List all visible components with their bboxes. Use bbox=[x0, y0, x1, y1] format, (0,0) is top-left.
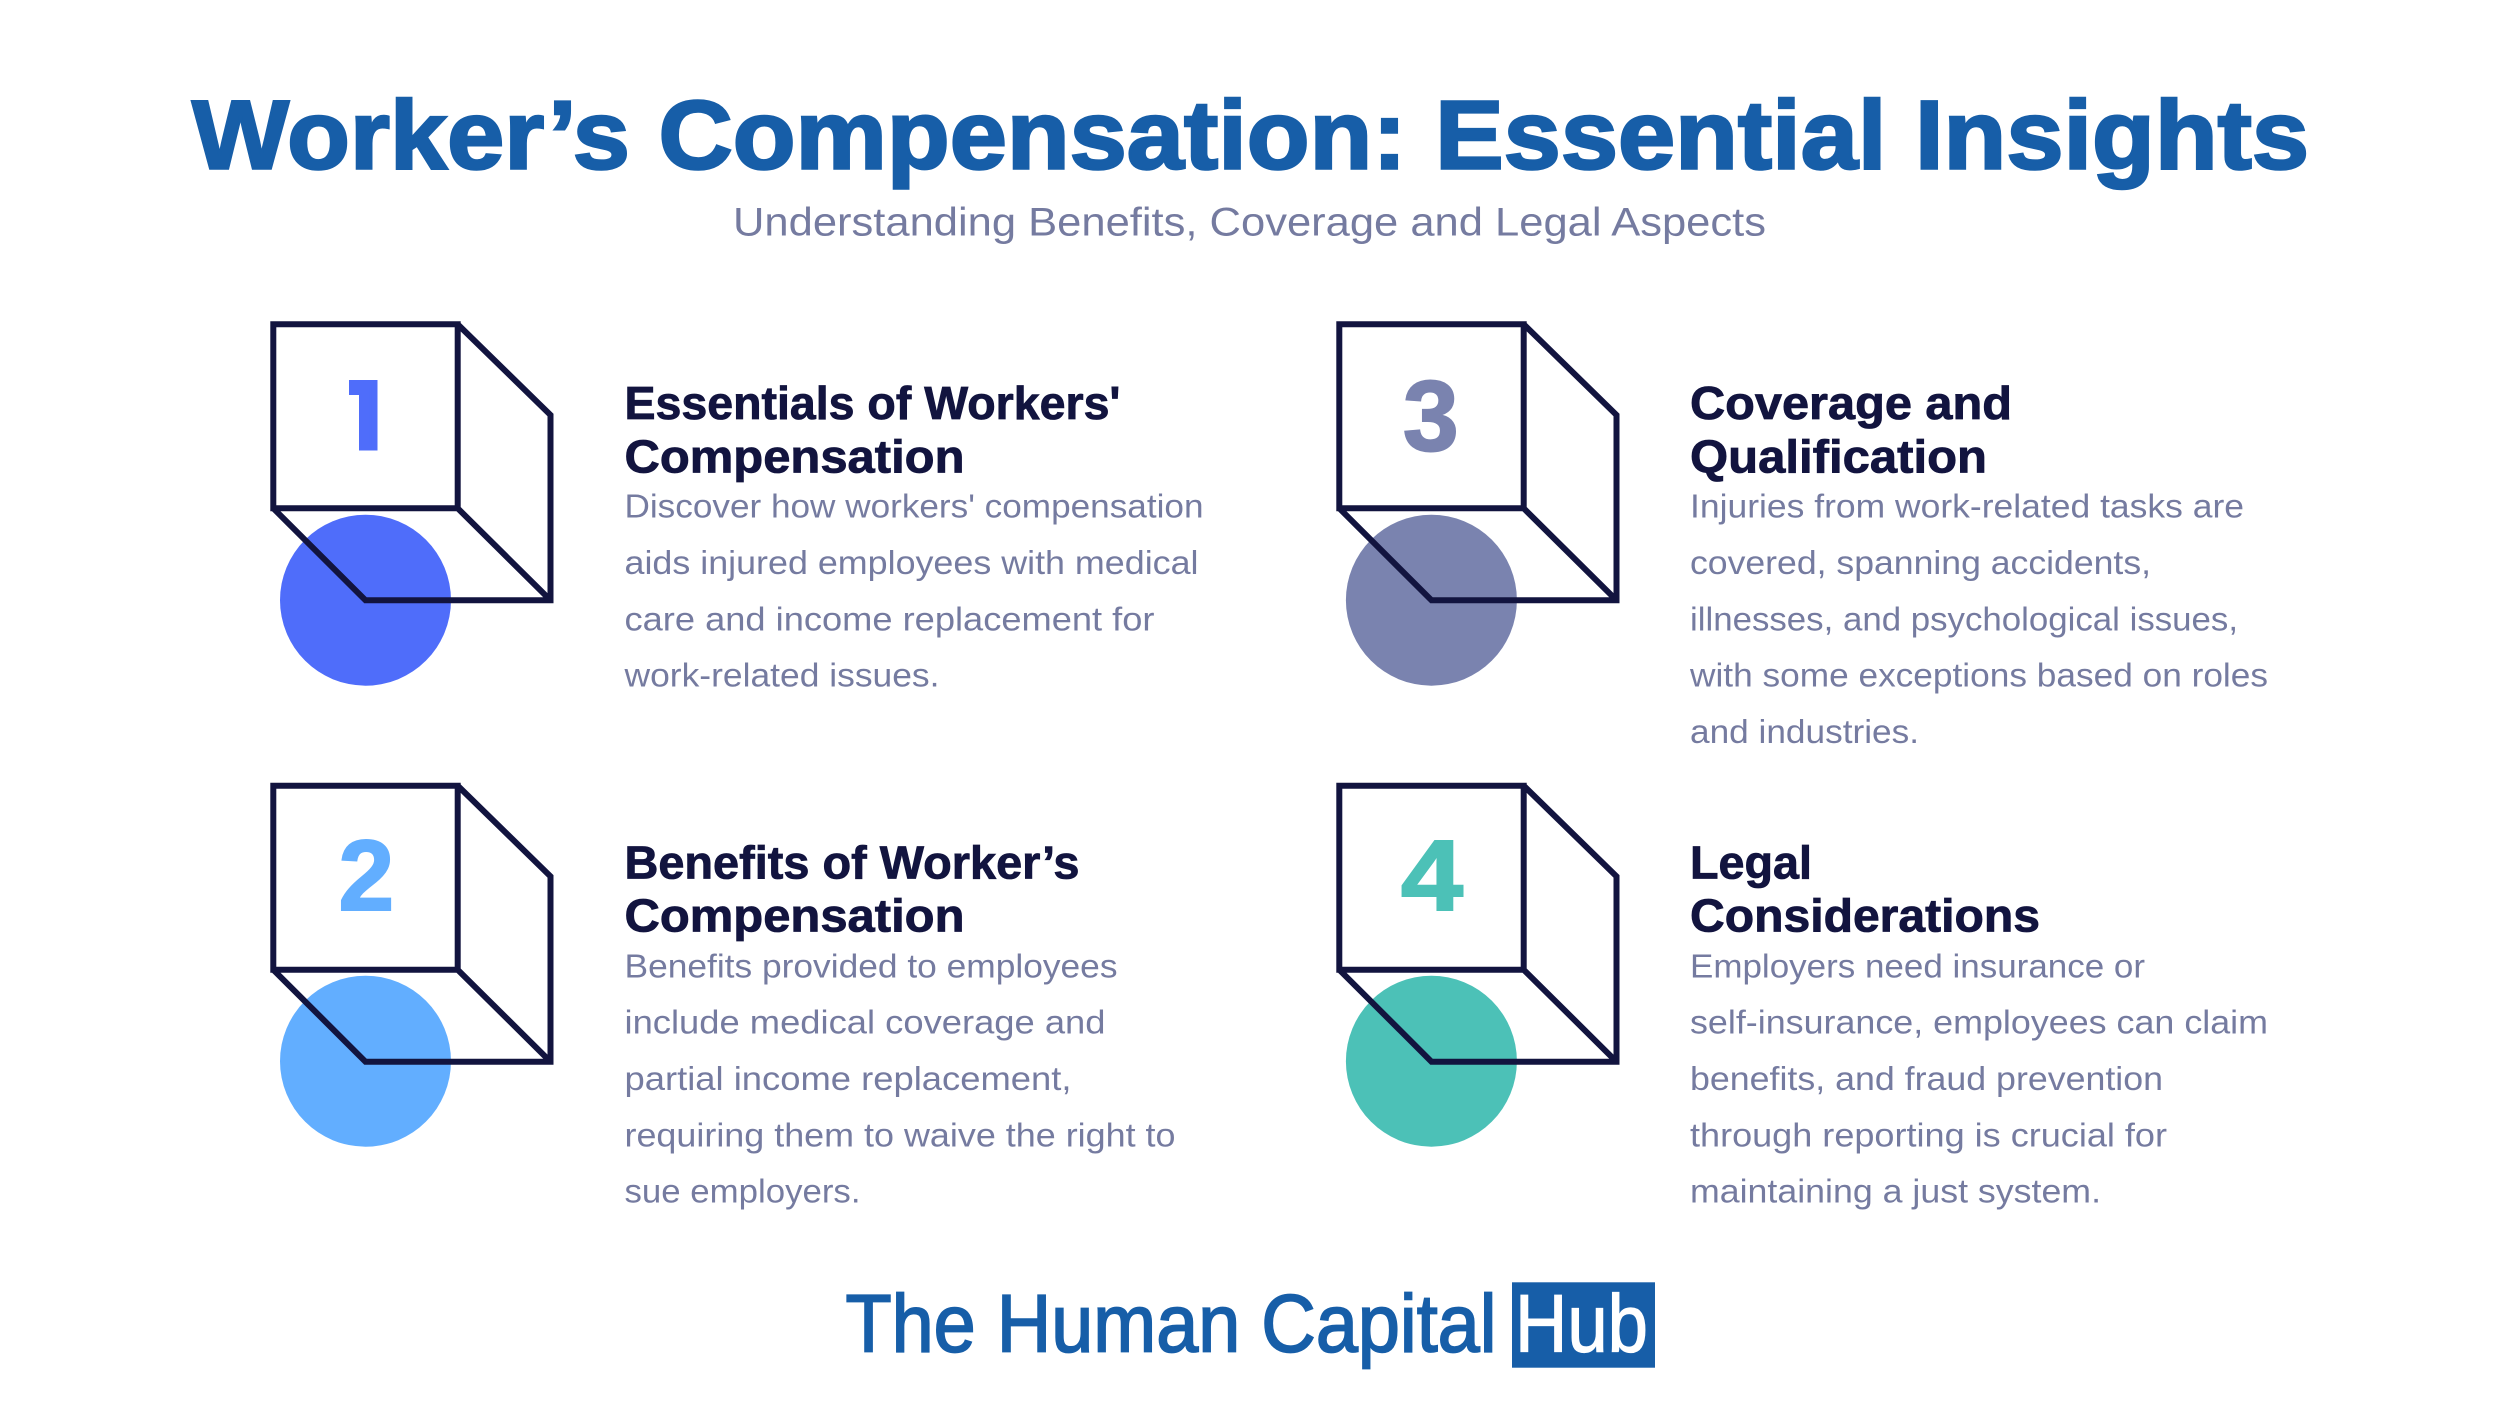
icon: cube with number 4: 4 bbox=[1401, 820, 1463, 932]
body text: Injuries from work-related tasks are bbox=[1690, 488, 2244, 525]
icon: cube with number 3 bbox=[1339, 324, 1616, 686]
heading bbox=[624, 377, 1120, 482]
body text: requiring them to waive the right to bbox=[624, 1116, 1176, 1153]
heading: Legal bbox=[1690, 836, 1812, 888]
logo: The Human Capital Hub: Hub bbox=[1515, 1279, 1648, 1370]
heading: Qualification bbox=[1690, 430, 1987, 482]
body text: with some exceptions based on roles bbox=[1689, 657, 2268, 694]
icon: cube with number 2 bbox=[273, 786, 550, 1147]
panel: coverage and qualification bbox=[1339, 324, 2268, 750]
body text: sue employers. bbox=[624, 1173, 860, 1210]
logo: The Human Capital Hub: The Human Capital bbox=[846, 1279, 1496, 1370]
body text: work-related issues. bbox=[623, 657, 940, 694]
body text: covered, spanning accidents, bbox=[1690, 544, 2151, 581]
body text: partial income replacement, bbox=[624, 1060, 1072, 1097]
heading bbox=[1690, 377, 2012, 482]
heading: Coverage and bbox=[1690, 377, 2012, 429]
body text: benefits, and fraud prevention bbox=[1690, 1060, 2163, 1097]
body text: Discover how workers' compensation bbox=[624, 488, 1204, 525]
body text: aids injured employees with medical bbox=[624, 544, 1198, 581]
icon: cube with number 2: 2 bbox=[338, 820, 394, 932]
heading: Essentials of Workers' bbox=[624, 377, 1120, 429]
heading: Compensation bbox=[624, 430, 964, 482]
heading: Compensation bbox=[624, 890, 964, 942]
heading bbox=[624, 836, 1080, 942]
body text: self-insurance, employees can claim bbox=[1690, 1004, 2268, 1041]
body text: and industries. bbox=[1690, 713, 1919, 750]
body text bbox=[1690, 947, 2268, 1210]
icon: cube with number 4 bbox=[1339, 786, 1616, 1147]
heading: Benefits of Worker’s bbox=[624, 836, 1080, 888]
icon: cube with number 1: 1 bbox=[340, 360, 396, 472]
body text: Benefits provided to employees bbox=[624, 947, 1118, 984]
heading: Considerations bbox=[1690, 890, 2040, 942]
icon: cube with number 3: 3 bbox=[1403, 360, 1459, 472]
body text bbox=[1689, 488, 2268, 750]
body text: include medical coverage and bbox=[624, 1004, 1106, 1041]
body text bbox=[624, 947, 1176, 1210]
title: Worker’s Compensation: Essential Insights bbox=[192, 80, 2309, 189]
body text: care and income replacement for bbox=[624, 600, 1155, 637]
subtitle: Understanding Benefits, Coverage and Legal Aspects bbox=[733, 200, 1766, 244]
panel: legal considerations bbox=[1339, 786, 2268, 1210]
body text: through reporting is crucial for bbox=[1690, 1116, 2167, 1153]
icon: cube with number 1 bbox=[273, 324, 550, 686]
panel: benefits of worker's compensation bbox=[273, 786, 1176, 1210]
heading bbox=[1690, 836, 2040, 942]
body text bbox=[623, 488, 1204, 694]
body text: Employers need insurance or bbox=[1690, 947, 2145, 984]
body text: illnesses, and psychological issues, bbox=[1690, 600, 2238, 637]
body text: maintaining a just system. bbox=[1690, 1173, 2101, 1210]
panel: essentials of workers' compensation bbox=[273, 324, 1204, 694]
